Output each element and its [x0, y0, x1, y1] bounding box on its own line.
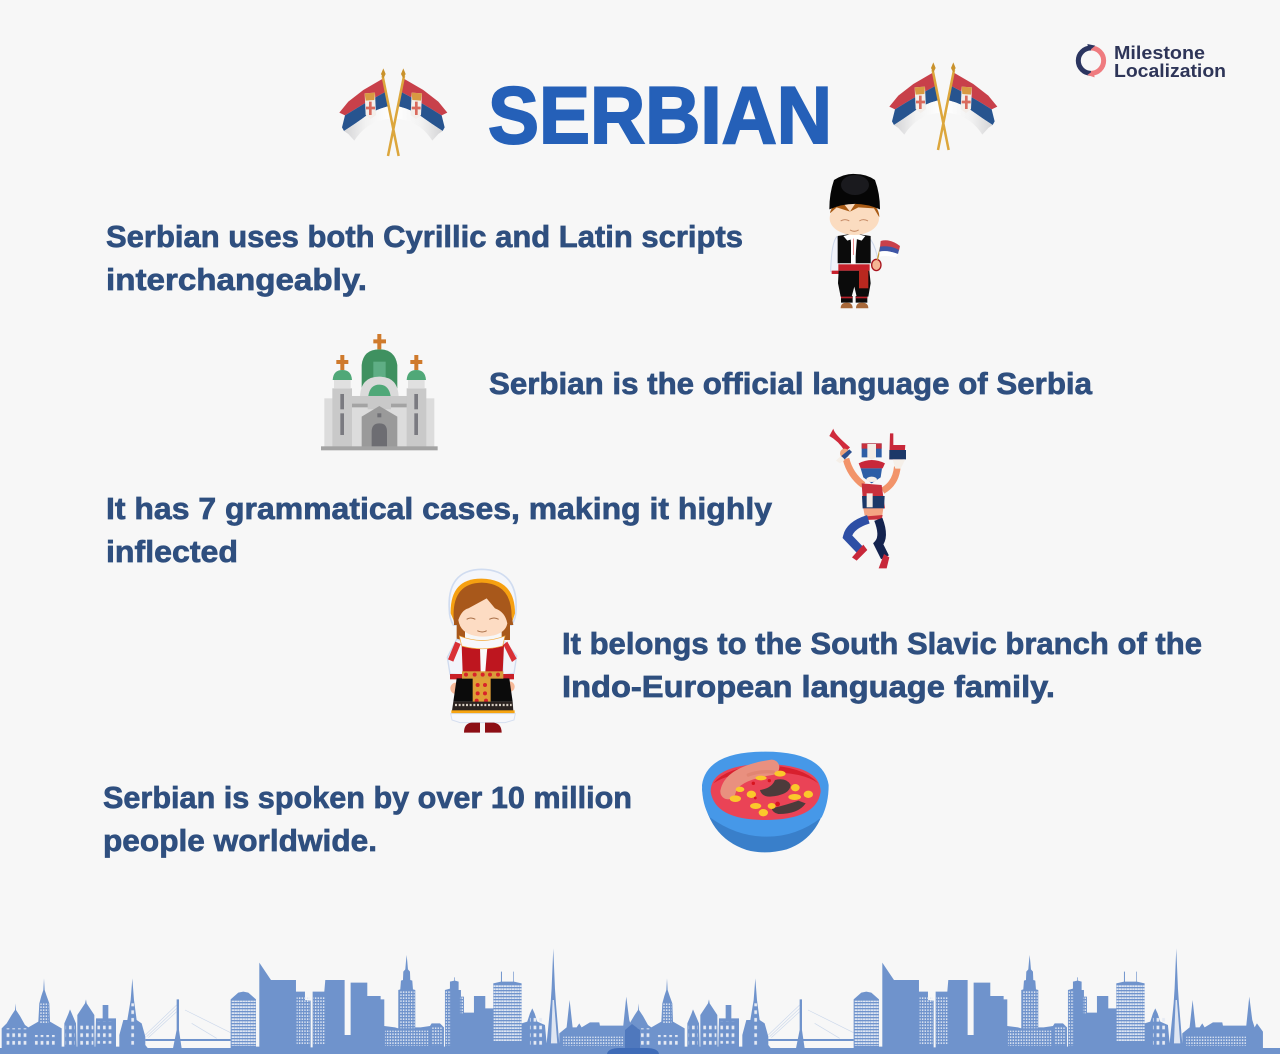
text: grammatical cases fact: inflected — [106, 534, 238, 569]
icon: boy in traditional costume — [829, 174, 900, 308]
text: official language fact: Serbian is the official language of Serbia — [489, 366, 1093, 401]
text: grammatical cases fact: It has 7 grammatical cases, making it highly — [106, 491, 773, 526]
text: grammatical cases fact — [106, 491, 773, 569]
icon: crossed Serbian flags right — [889, 62, 997, 150]
logo wordmark — [1114, 42, 1226, 81]
icon: bowl of red soup — [702, 752, 829, 852]
logo: Milestone Localization — [1078, 42, 1226, 81]
logo wordmark: Localization — [1114, 60, 1226, 81]
skyline footer — [0, 948, 1280, 1054]
text: scripts fact: interchangeably. — [106, 262, 367, 297]
logo ring — [1078, 44, 1104, 77]
text: speakers fact: Serbian is spoken by over 10 million — [103, 780, 632, 815]
icon: orthodox church — [321, 334, 438, 450]
icon: Serbian sports fan — [829, 429, 906, 568]
title: SERBIAN — [488, 71, 832, 161]
text: speakers fact — [103, 780, 632, 858]
text: language family fact: It belongs to the South Slavic branch of the — [562, 626, 1202, 661]
icon: crossed Serbian flags left — [339, 68, 447, 156]
icon: girl in traditional costume — [447, 569, 517, 733]
text: language family fact: Indo-European language family. — [562, 669, 1055, 704]
text: speakers fact: people worldwide. — [103, 823, 377, 858]
text: scripts fact: Serbian uses both Cyrillic and Latin scripts — [106, 219, 743, 254]
text: language family fact — [562, 626, 1202, 704]
logo wordmark: Milestone — [1114, 42, 1205, 63]
text: scripts fact — [106, 219, 743, 297]
